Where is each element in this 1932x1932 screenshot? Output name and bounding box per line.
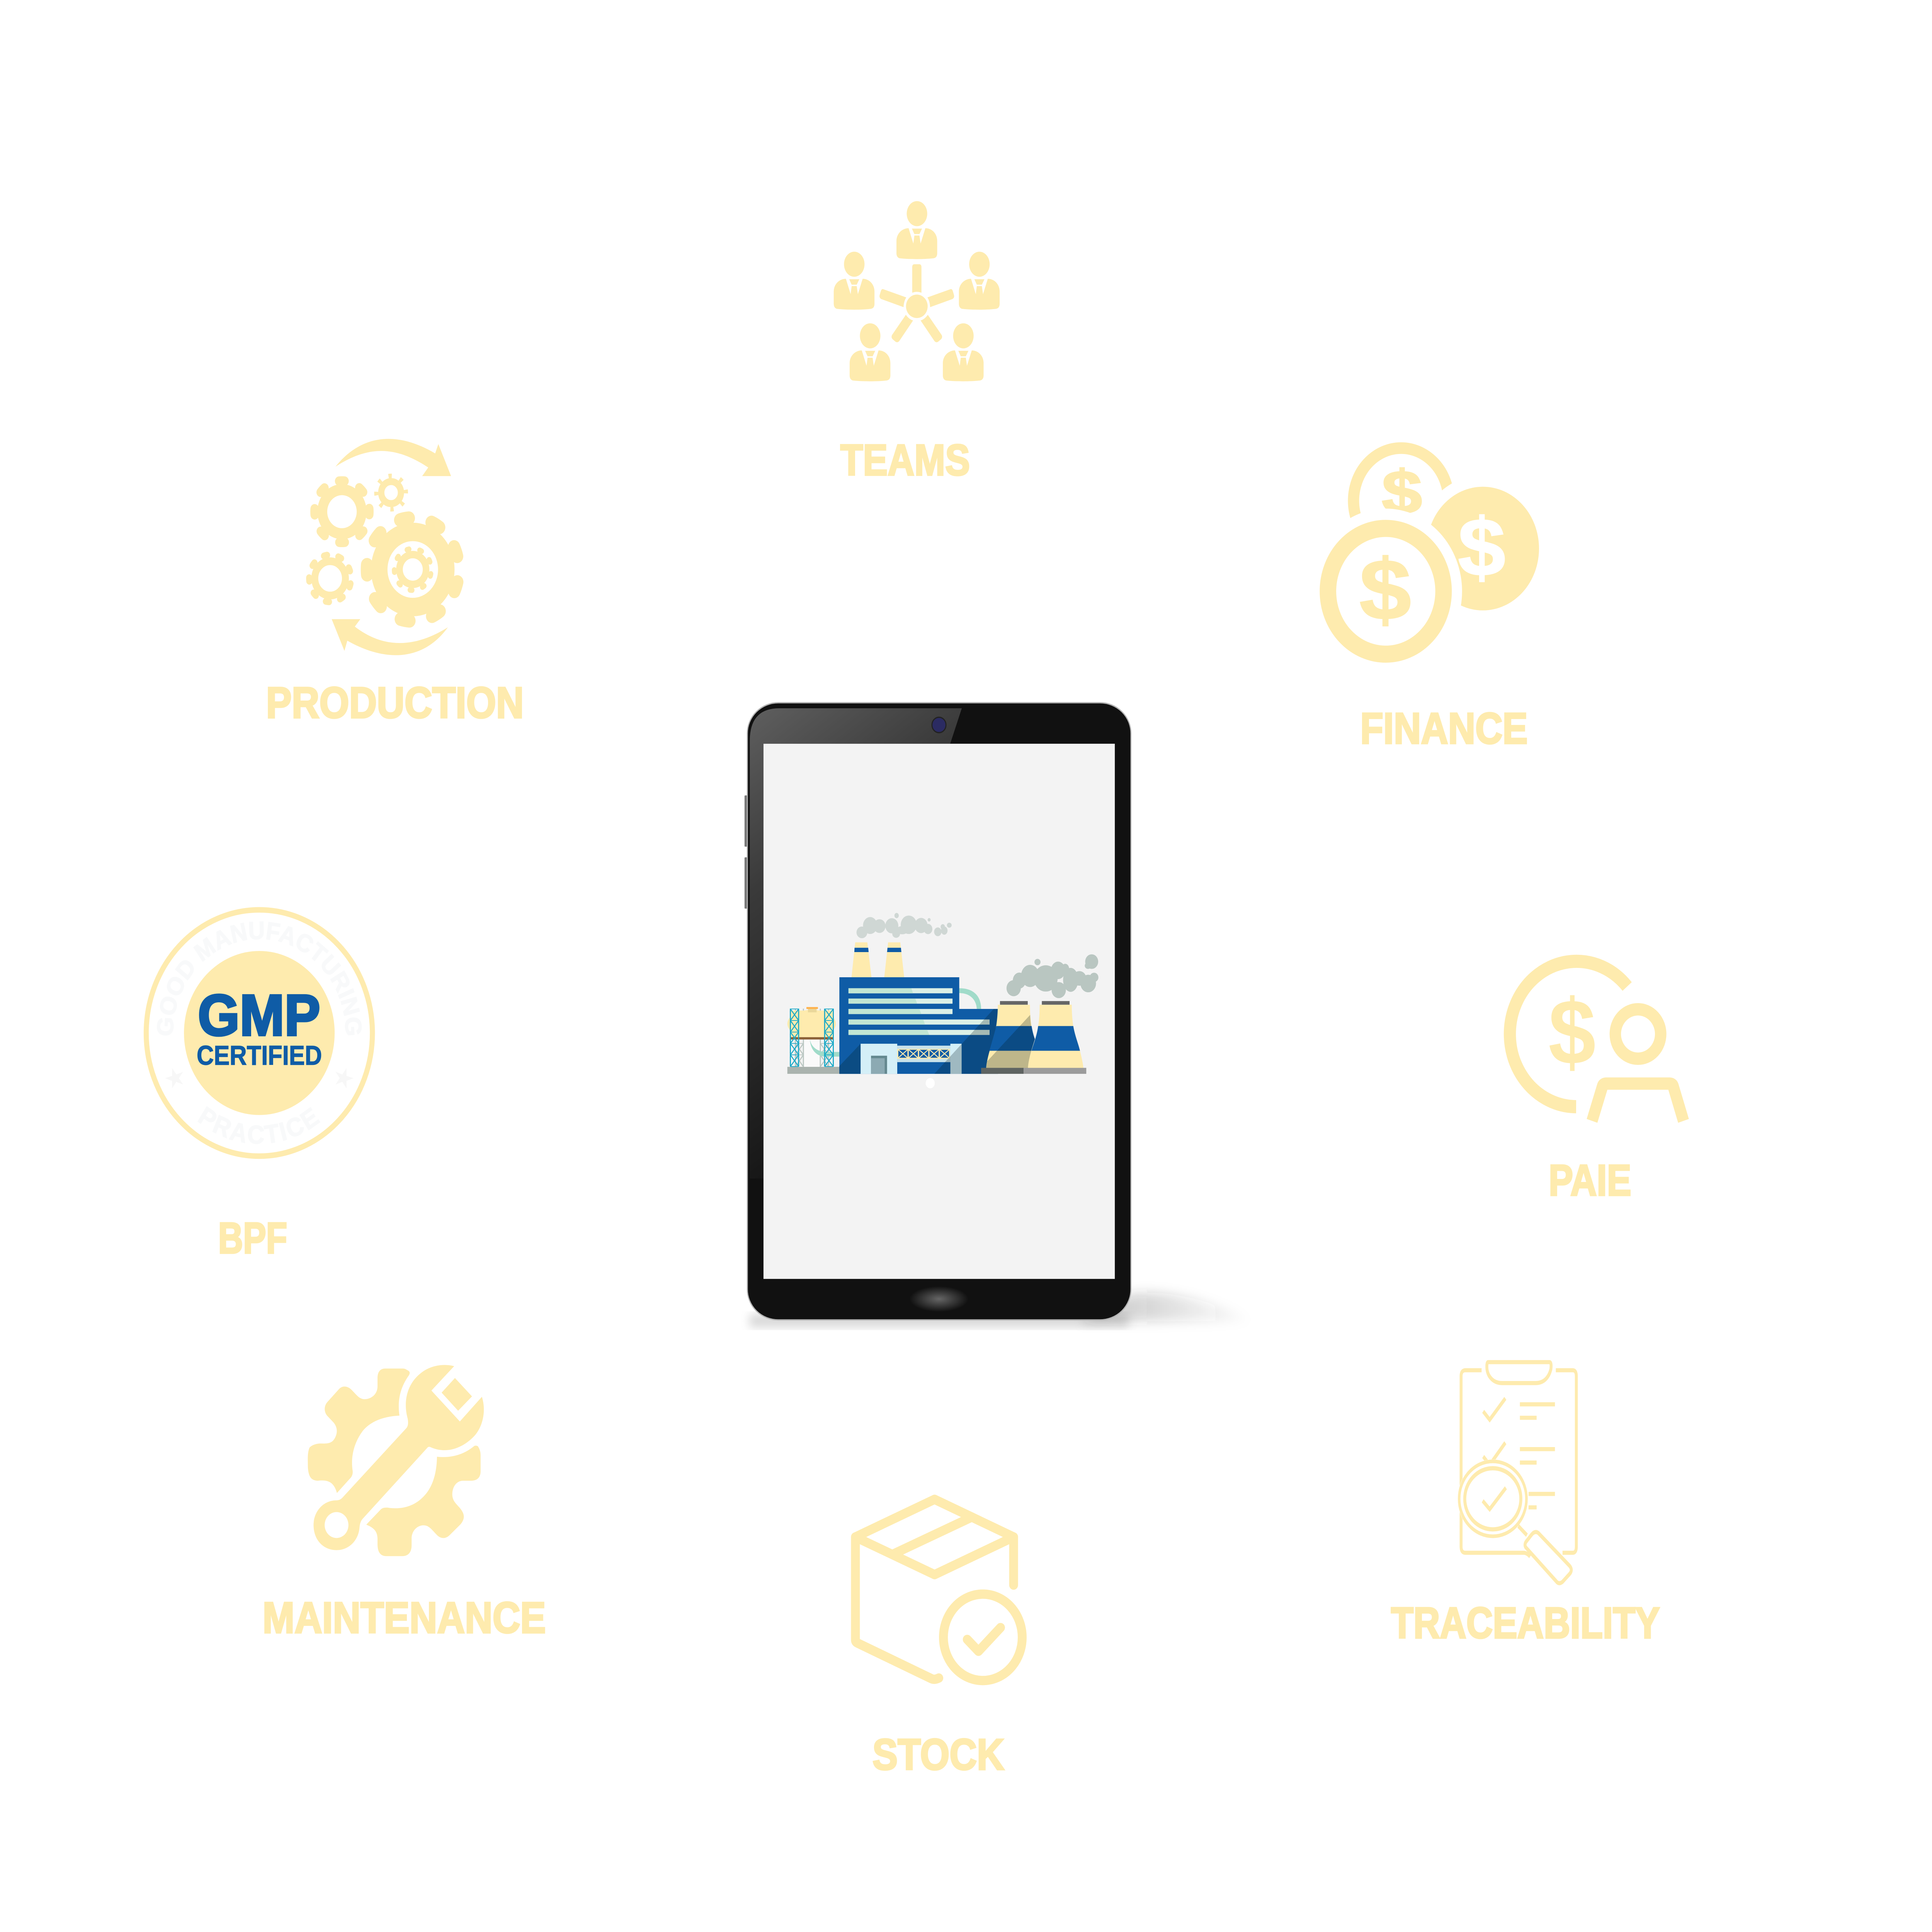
chimney smoke <box>857 913 952 938</box>
icon: GMP certified badge <box>146 910 372 1156</box>
icon: GMP certified badge: GOOD MANUFACTURING <box>152 917 366 1037</box>
tablet drop shadow <box>750 1293 1255 1325</box>
module: stock <box>855 1499 1022 1779</box>
label: paie: PAIE <box>1549 1156 1631 1205</box>
pipe to tower <box>959 988 981 1009</box>
module: maintenance <box>262 1365 546 1643</box>
label: finance: FINANCE <box>1360 704 1528 753</box>
label: stock: STOCK <box>872 1730 1004 1779</box>
icon: dollar coins: $ <box>1382 458 1422 527</box>
icon: gears with cycle arrows <box>304 439 469 655</box>
icon: dollar coins: $ <box>1458 502 1505 593</box>
factory illustration <box>787 913 1099 1088</box>
label: bpf: BPF <box>218 1214 287 1263</box>
icon: wrench and gear <box>308 1365 484 1556</box>
icon: payroll person and dollar <box>1510 961 1684 1121</box>
icon: dollar coins <box>1310 448 1550 674</box>
label: maintenance: MAINTENANCE <box>262 1594 546 1643</box>
module: production <box>266 439 524 727</box>
white dot on screen <box>926 1078 935 1088</box>
icon: clipboard and magnifier <box>1458 1362 1577 1583</box>
module: teams <box>834 201 1000 485</box>
module: traceability <box>1391 1362 1660 1648</box>
icon: GMP certified badge: CERTIFIED <box>197 1041 322 1071</box>
factory building <box>839 977 998 1074</box>
label: teams: TEAMS <box>840 436 970 485</box>
factory chimneys <box>852 942 904 977</box>
cooling tower smoke <box>1007 954 1099 998</box>
module: finance <box>1310 448 1550 753</box>
icon: box with check <box>855 1499 1022 1680</box>
icon: payroll person and dollar: $ <box>1548 980 1596 1084</box>
icon: team network <box>834 201 1000 381</box>
module: bpf <box>146 910 372 1263</box>
module: paie <box>1510 961 1684 1205</box>
storage tank on towers <box>787 1007 840 1074</box>
label: traceability: TRACEABILITY <box>1391 1599 1660 1648</box>
tablet with factory illustration <box>745 703 1255 1325</box>
label: production: PRODUCTION <box>266 679 524 727</box>
cooling towers <box>981 1001 1086 1074</box>
tablet body <box>745 703 1131 1320</box>
icon: GMP certified badge: PRACTICE <box>194 1101 325 1150</box>
icon: dollar coins: $ <box>1359 542 1411 638</box>
icon: GMP certified badge: GMP <box>198 983 320 1048</box>
